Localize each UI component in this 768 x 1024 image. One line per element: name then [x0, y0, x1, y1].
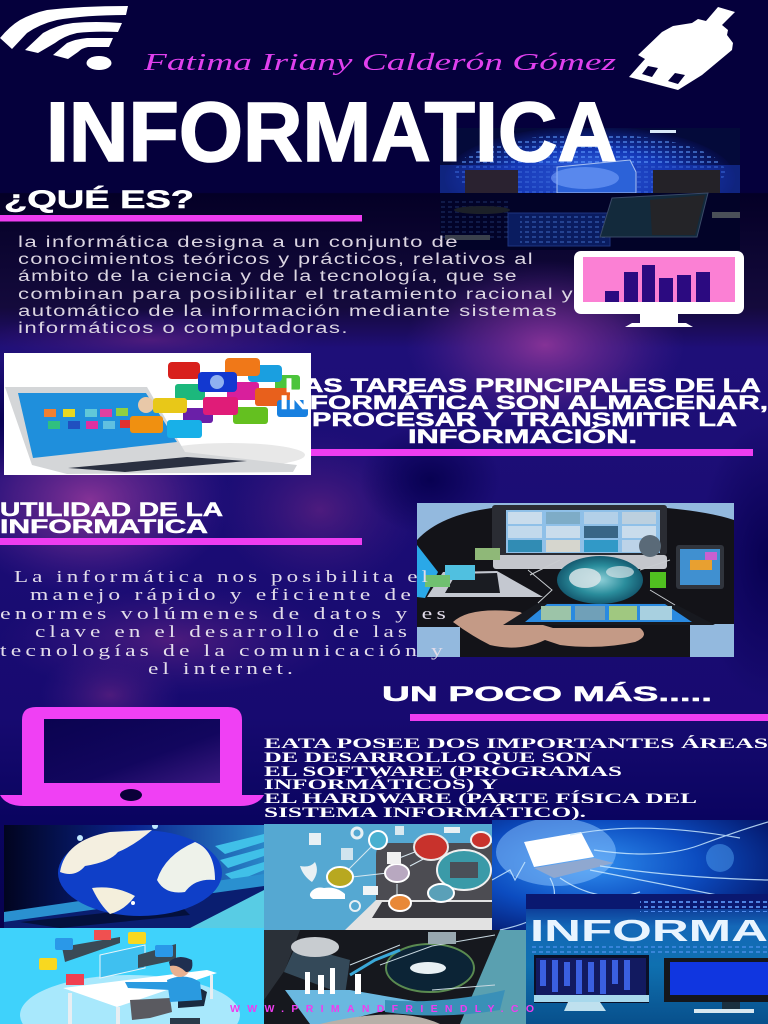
text block: main tasks heading: PROCESAR Y TRANSMITIR LA: [312, 410, 737, 431]
header photo: computers and data globe: [440, 128, 740, 250]
section heading: un poco mas: UN POCO MÁS.....: [382, 683, 712, 706]
text block: utility: clave en el desarrollo de las: [35, 622, 411, 641]
text block: definition: combinan para posibilitar el tratamiento racional y: [18, 286, 574, 303]
text block: main tasks heading: INFORMACIÓN.: [408, 426, 637, 448]
text block: utility: tecnologías de la comunicación y: [0, 641, 447, 660]
section heading: que es: [0, 185, 362, 222]
photo: developer at desk: [0, 928, 264, 1024]
text block: main tasks heading: [280, 376, 768, 456]
author name: Fatima Iriany Calderón Gómez: [142, 50, 617, 76]
text block: software and hardware: DE DESARROLLO QUE SON: [264, 750, 592, 766]
photo: information technology text and monitors: INFORMA: [530, 913, 768, 948]
photo: global network over tablet: [264, 930, 526, 1024]
text block: utility: manejo rápido y eficiente de: [30, 585, 415, 604]
icon: laptop outline: [0, 707, 264, 806]
title: INFORMATICA: [46, 85, 617, 179]
text block: software and hardware: EL SOFTWARE (PROGRAMAS: [264, 764, 622, 780]
photo: glowing laptop: [492, 820, 768, 930]
text block: main tasks heading: INFORMÁTICA SON ALMACENAR,: [280, 392, 768, 414]
text block: utility: el internet.: [148, 659, 297, 678]
text block: software and hardware: EATA POSEE DOS IMPORTANTES ÁREAS: [264, 735, 768, 752]
text block: software and hardware: EL HARDWARE (PARTE FÍSICA DEL: [264, 790, 697, 807]
text block: software and hardware: [264, 735, 768, 821]
website watermark: WWW.PRIMANDFRIENDLY.CO: [230, 1003, 540, 1015]
text block: definition: automático de la información mediante sistemas: [18, 303, 558, 320]
section heading: que es: ¿QUÉ ES?: [4, 185, 194, 214]
section heading: utilidad: UTILIDAD DE LA: [0, 500, 223, 521]
photo: hands holding devices: [417, 503, 734, 657]
text block: definition: ámbito de la ciencia y de la tecnología, que se: [18, 268, 518, 285]
text block: software and hardware: INFORMÁTICOS) Y: [264, 776, 498, 793]
text block: definition: informáticos o computadoras.: [18, 320, 349, 337]
text block: definition: la informática designa a un conjunto de: [18, 234, 459, 251]
section heading: utilidad: [0, 500, 362, 545]
photo: laptop with app icons: [4, 353, 311, 475]
icon: wifi: [0, 6, 128, 70]
photo: connected laptop diagram: [264, 824, 492, 930]
text block: utility: [0, 567, 450, 678]
photo: globe over keyboard: [4, 825, 264, 928]
text block: utility: La informática nos posibilita el: [14, 567, 432, 586]
text block: definition: conocimientos teóricos y prácticos, relativos al: [18, 251, 534, 268]
text block: definition: [18, 234, 574, 337]
photo: information technology text and monitors: [526, 894, 768, 1024]
text block: software and hardware: SISTEMA INFORMÁTICO).: [264, 804, 586, 821]
icon: monitor with bar chart: [574, 251, 744, 327]
text block: main tasks heading: LAS TAREAS PRINCIPALES DE LA: [285, 376, 761, 397]
text block: utility: enormes volúmenes de datos y es: [0, 604, 450, 623]
icon: usb plug: [629, 7, 735, 90]
section heading: utilidad: INFORMATICA: [0, 517, 208, 538]
section heading: un poco mas: [382, 683, 768, 721]
